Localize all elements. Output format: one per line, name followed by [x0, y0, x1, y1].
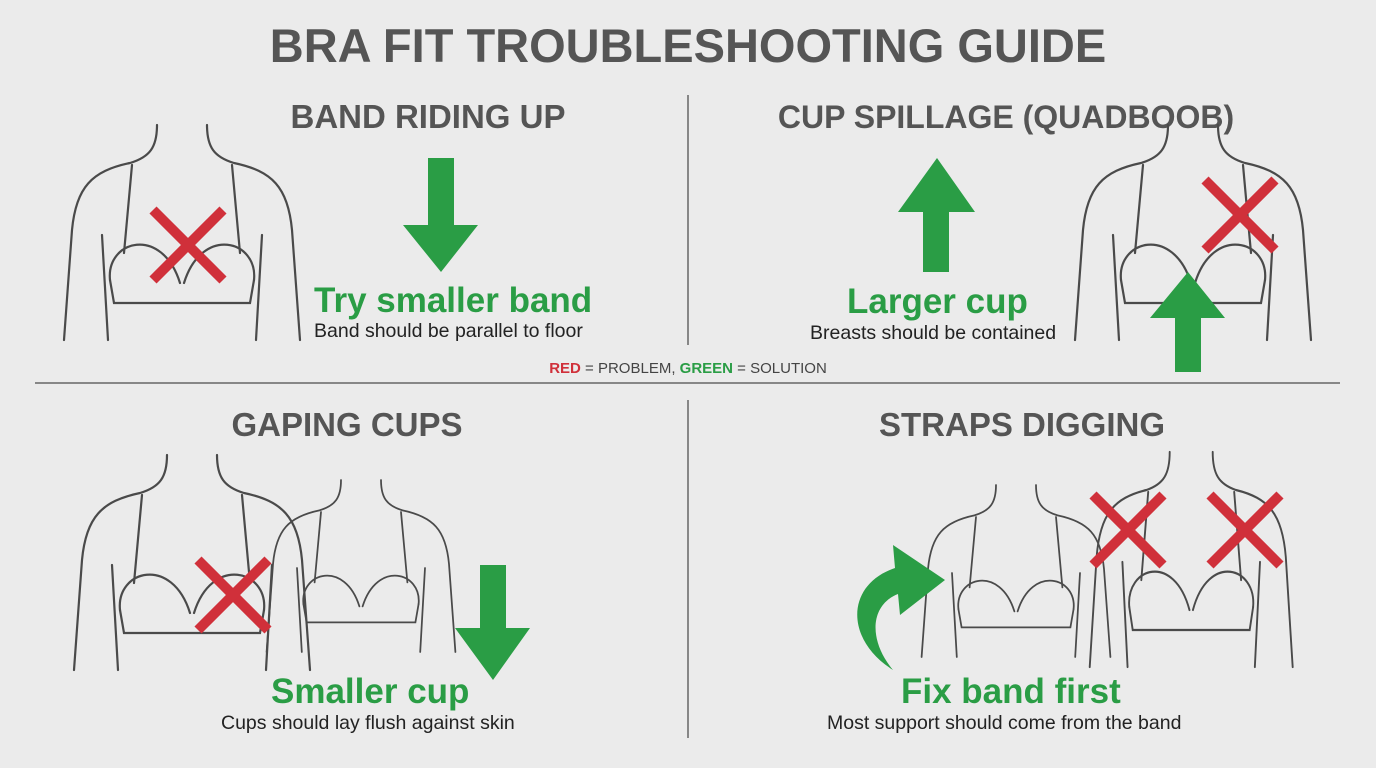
panel: gaping cups — [74, 406, 530, 734]
arrow: up — [898, 158, 975, 272]
figure: torso front — [74, 455, 310, 670]
panel: cup spillage — [778, 99, 1311, 372]
note: Band should be parallel to floor — [314, 320, 583, 342]
icon: red x — [198, 560, 268, 630]
solution text: Smaller cup — [271, 672, 469, 711]
panel: straps digging — [827, 406, 1293, 734]
heading: cup spillage: CUP SPILLAGE (QUADBOOB) — [778, 99, 1234, 135]
figure: torso back — [267, 480, 455, 652]
icon: red x left — [1093, 495, 1163, 565]
solution text: Larger cup — [847, 282, 1028, 321]
heading: gaping cups: GAPING CUPS — [231, 406, 463, 443]
figure: torso left — [922, 485, 1110, 657]
arrow: down — [403, 158, 478, 272]
heading: band riding up: BAND RIDING UP — [290, 98, 566, 135]
arrow: down — [455, 565, 530, 680]
note: Breasts should be contained — [810, 322, 1056, 344]
panel: band riding up — [64, 98, 592, 342]
solution text: Fix band first — [901, 672, 1121, 711]
heading: straps digging: STRAPS DIGGING — [879, 406, 1165, 443]
arrow: up small — [1150, 272, 1225, 372]
solution text: Try smaller band — [314, 281, 592, 320]
legend: RED = PROBLEM, GREEN = SOLUTION — [549, 360, 827, 377]
note: Most support should come from the band — [827, 712, 1181, 734]
title: BRA FIT TROUBLESHOOTING GUIDE — [270, 19, 1106, 72]
icon: red x right — [1210, 495, 1280, 565]
arrow: curved — [857, 545, 945, 670]
icon: red x — [1205, 180, 1275, 250]
figure: torso spillage — [1075, 125, 1311, 340]
figure: torso right — [1090, 452, 1293, 667]
note: Cups should lay flush against skin — [221, 712, 515, 734]
icon: red x — [153, 210, 223, 280]
figure: torso band — [64, 125, 300, 340]
